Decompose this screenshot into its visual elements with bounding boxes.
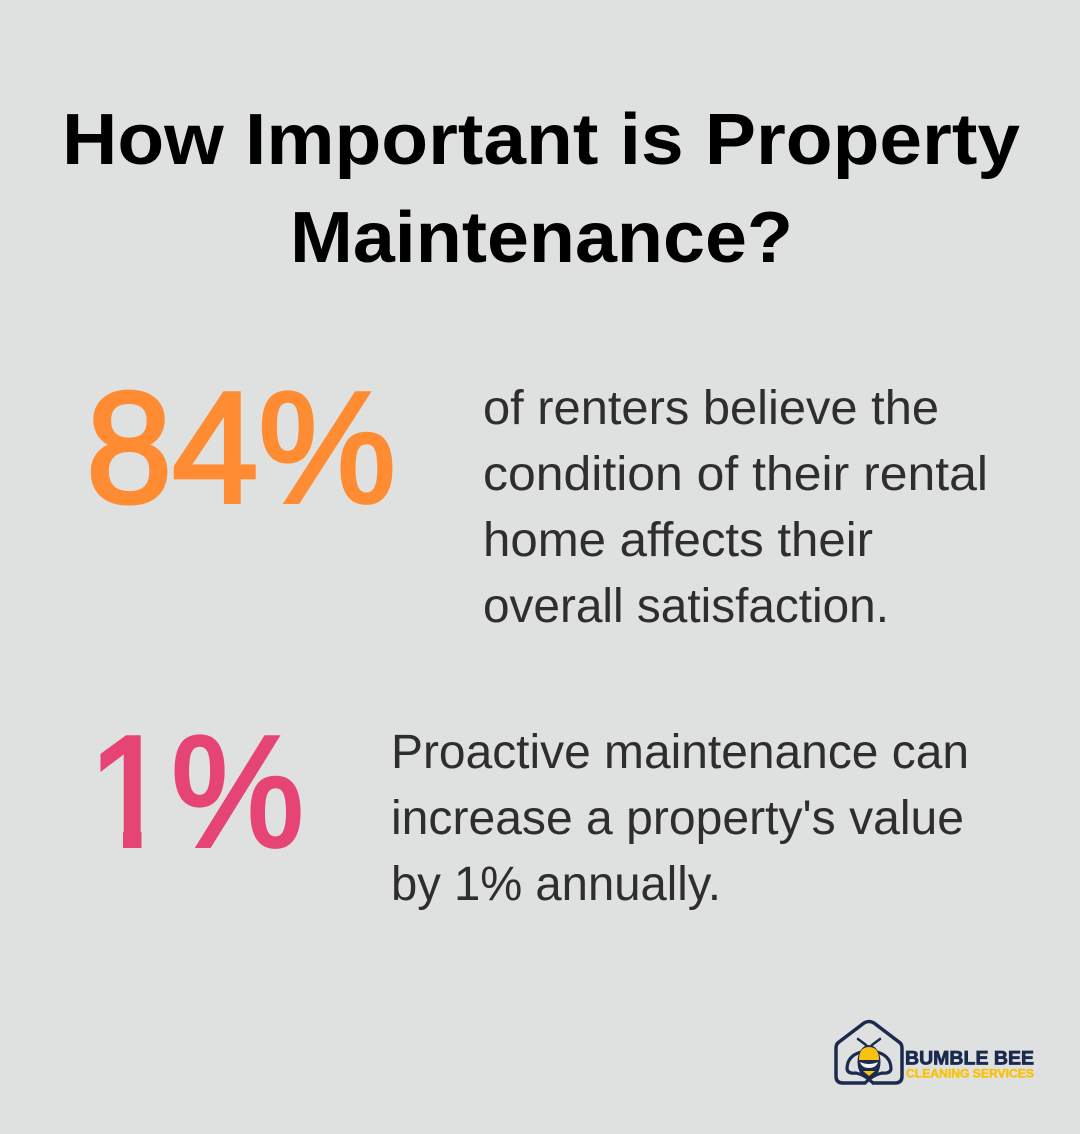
text block: proactive maintenance: by 1% annually. <box>391 858 721 911</box>
logo tagline: CLEANING SERVICES <box>906 1068 1034 1080</box>
text block: proactive maintenance: increase a property's value <box>391 792 964 845</box>
text block: renters satisfaction: of renters believe the <box>483 382 939 435</box>
logo wordmark: BUMBLE BEE <box>905 1048 1034 1070</box>
text block: renters satisfaction <box>483 382 988 633</box>
title: Maintenance? <box>290 198 793 278</box>
stat: 84%: 84% <box>86 360 396 536</box>
text block: renters satisfaction: home affects their <box>483 514 873 567</box>
text block: proactive maintenance: Proactive maintenance can <box>391 726 969 779</box>
icon: house with bee <box>836 1022 902 1083</box>
text block: proactive maintenance <box>391 726 969 911</box>
text block: renters satisfaction: overall satisfaction. <box>483 580 889 633</box>
stat: 1%: 1% <box>88 704 304 880</box>
title <box>62 100 1020 278</box>
logo: Bumble Bee Cleaning Services <box>836 1022 1034 1083</box>
title: How Important is Property <box>62 100 1020 180</box>
text block: renters satisfaction: condition of their rental <box>483 448 988 501</box>
